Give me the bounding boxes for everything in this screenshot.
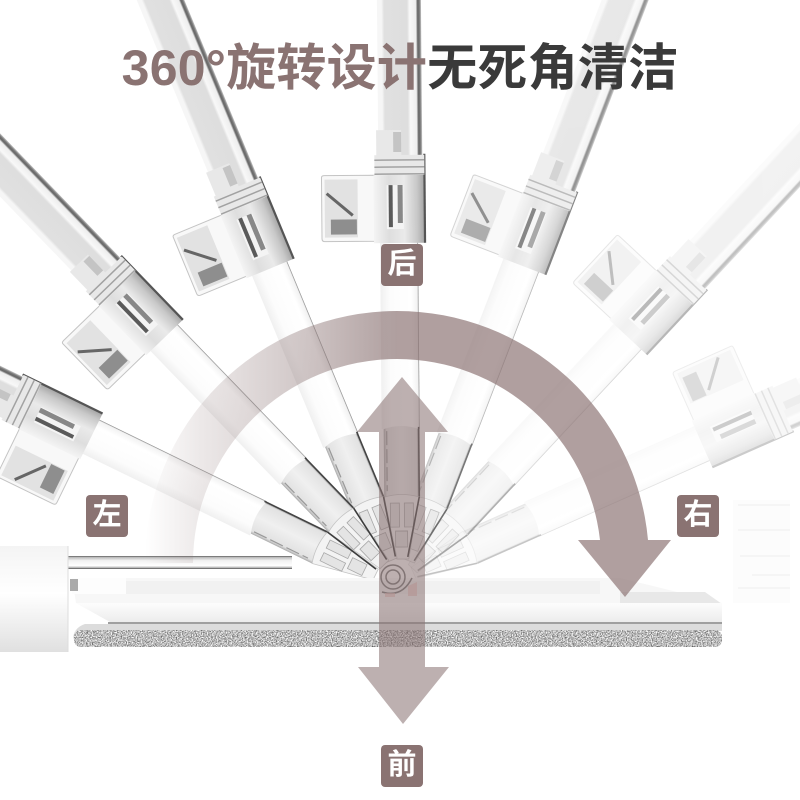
vertical double arrow xyxy=(357,377,449,724)
handle position: 43 degrees right xyxy=(356,0,800,586)
label: right xyxy=(677,495,719,537)
pivot joint xyxy=(381,565,412,593)
handle position: straight back xyxy=(318,0,428,560)
handle position: 66 degrees right xyxy=(382,173,800,596)
handle position: 22.5 degrees left xyxy=(10,0,415,590)
handle position: 64 degrees left xyxy=(0,198,387,645)
label: back xyxy=(381,244,423,286)
title: 360°旋转设计无死角清洁 xyxy=(122,40,678,96)
label: back: 后 xyxy=(387,248,416,280)
left horizontal handle xyxy=(0,546,292,652)
rotation arc arrow xyxy=(145,311,671,597)
mop head base xyxy=(72,565,722,647)
label: front: 前 xyxy=(387,749,416,781)
label: front xyxy=(381,745,423,787)
label: left: 左 xyxy=(92,499,122,531)
faint horizontal ghost clip at right xyxy=(733,500,790,603)
handle position: 44 degrees left xyxy=(0,0,402,619)
label: right: 右 xyxy=(683,499,712,531)
label: left xyxy=(86,495,128,537)
handle position: 21 degrees right xyxy=(336,0,722,570)
pivot accents xyxy=(385,582,417,597)
microfibre pad xyxy=(74,630,722,647)
